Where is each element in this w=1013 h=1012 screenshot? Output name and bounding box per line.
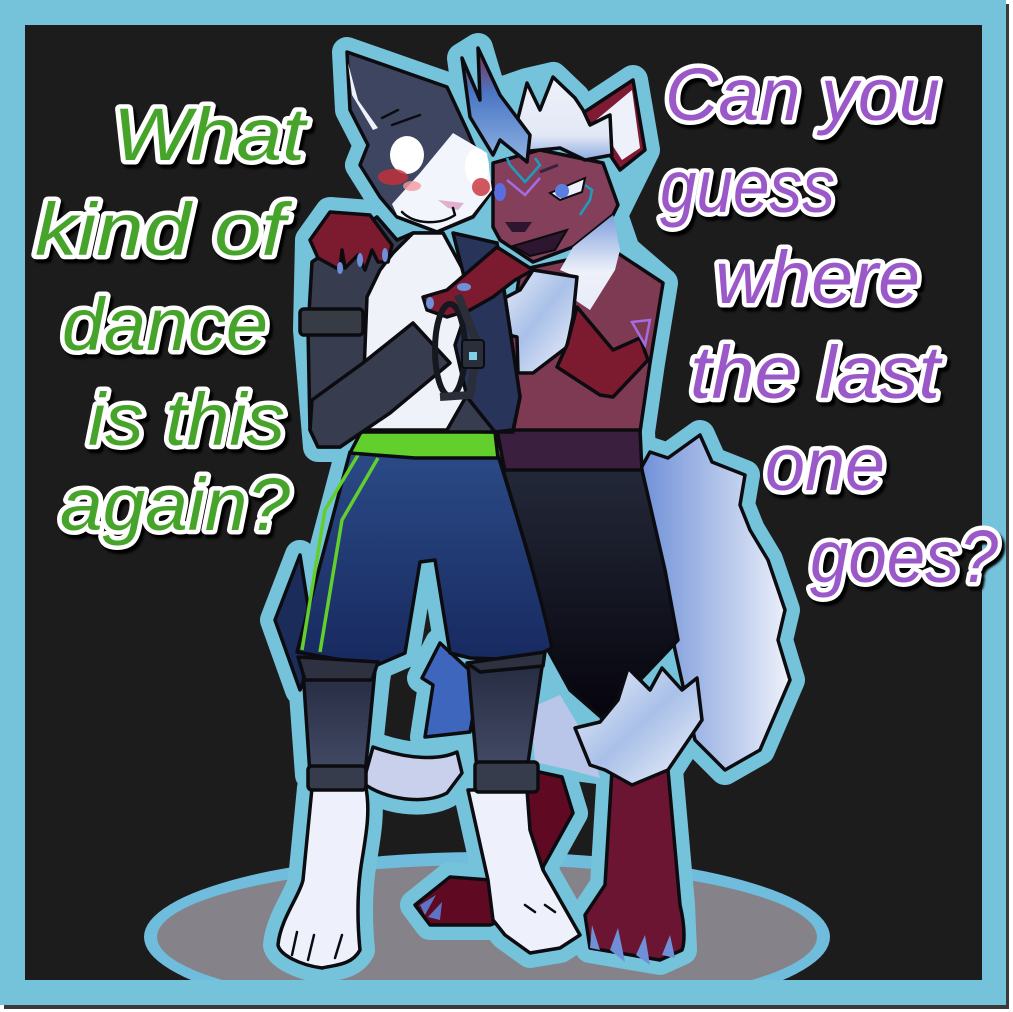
speech text: purple question: where <box>715 236 920 319</box>
back claws <box>420 895 442 920</box>
right leg <box>468 660 543 770</box>
left knee band <box>298 657 378 680</box>
character: red fox <box>415 48 790 965</box>
ankle fur <box>575 668 702 785</box>
speech text: purple question: Can you <box>665 53 940 136</box>
muzzle white <box>392 133 492 230</box>
claw details <box>426 283 471 309</box>
jacket right side <box>453 233 520 432</box>
speech text: purple question: the last <box>690 331 944 414</box>
forearm <box>557 307 648 397</box>
forearm <box>310 323 450 447</box>
toe lines <box>292 905 555 960</box>
blush <box>378 169 490 196</box>
mouth <box>402 208 455 222</box>
left foot <box>278 788 368 968</box>
tail dark part <box>275 555 315 690</box>
green waistband <box>350 430 498 458</box>
torso <box>498 250 663 432</box>
tail white part <box>363 747 462 800</box>
white chest <box>362 233 472 430</box>
right ankle strap <box>475 762 538 792</box>
right foot <box>468 790 580 953</box>
speech text: green question: What <box>113 93 309 176</box>
speech text: purple question: guess <box>660 145 835 228</box>
speech text: purple question <box>660 53 998 598</box>
right eye <box>465 148 489 186</box>
nose <box>438 200 464 210</box>
front claws <box>590 925 675 965</box>
speech text: green question: dance <box>62 283 268 366</box>
hand on shoulder <box>310 212 392 270</box>
sticker outline halo <box>275 48 790 968</box>
head <box>347 52 493 232</box>
left eye <box>390 136 424 174</box>
arm markings <box>632 320 650 345</box>
speech text: green question: is this <box>88 378 285 461</box>
hair spikes <box>518 77 612 160</box>
shoulder claws <box>337 248 388 274</box>
blue horn crest <box>462 48 530 162</box>
front leg <box>585 770 684 960</box>
brow <box>382 110 420 125</box>
speech text: green question: kind of <box>35 188 292 271</box>
lower tail, blue <box>422 643 480 737</box>
snout and mouth <box>505 165 567 256</box>
red hand on chain <box>423 247 533 317</box>
speech text: green question: again? <box>60 463 290 546</box>
belt <box>497 430 642 472</box>
back leg and foot <box>415 770 573 925</box>
shorts green piping <box>302 455 378 652</box>
ear <box>583 80 645 170</box>
neck fur <box>560 215 620 310</box>
shorts <box>297 452 552 666</box>
character: tuxedo cat <box>275 52 580 968</box>
speech text: green question <box>35 93 309 546</box>
inner ear <box>348 63 378 130</box>
fluff behind leg <box>530 695 600 778</box>
inner ear <box>596 90 640 160</box>
right knee band <box>467 652 545 672</box>
face markings <box>507 158 592 215</box>
speech text: purple question: one <box>765 423 885 506</box>
arm band <box>300 309 363 335</box>
black pants <box>503 470 678 725</box>
speech text: purple question: goes? <box>810 515 998 598</box>
big fluffy tail <box>640 435 790 770</box>
head <box>493 150 618 262</box>
chest fur cuff <box>495 270 577 373</box>
chain ring <box>435 295 484 397</box>
grey upper body <box>308 217 520 447</box>
left ankle strap <box>308 766 366 790</box>
red fox eyes <box>494 178 585 201</box>
left leg <box>303 670 375 775</box>
ground ellipse <box>144 852 830 980</box>
